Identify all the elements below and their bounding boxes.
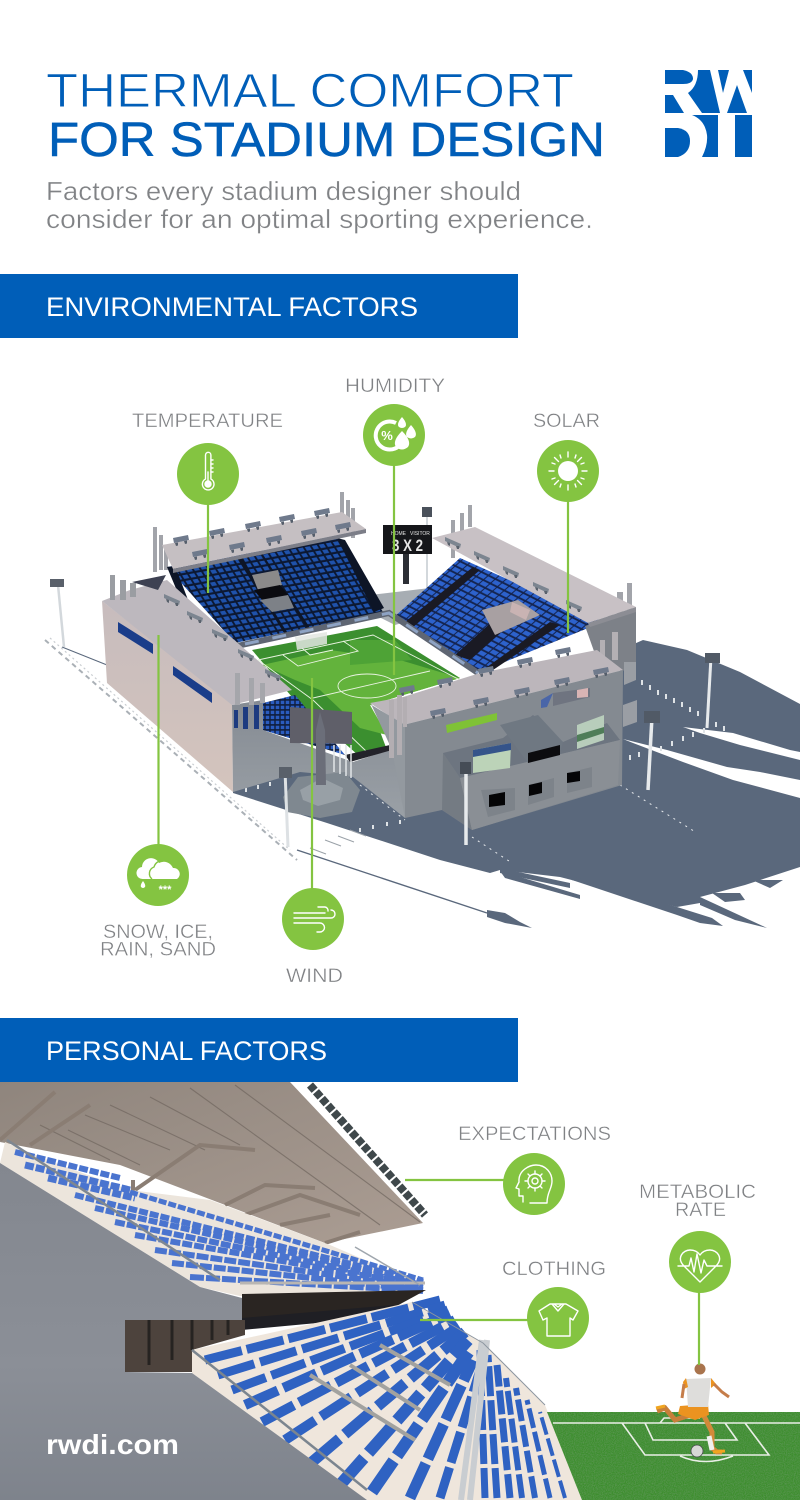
callout: solar [533, 411, 600, 633]
right stand seats [393, 558, 603, 672]
pitch markings [553, 1418, 800, 1462]
callout: snow, ice, rain, sand: RAIN, SAND [100, 940, 216, 960]
grass [547, 1412, 800, 1500]
callout: temperature [132, 411, 283, 593]
icon: cloud with snow and rain: *** [159, 884, 172, 896]
back scoreboard plaza [370, 588, 440, 625]
title [46, 65, 605, 167]
title: FOR STADIUM DESIGN [48, 114, 605, 167]
upper tier seats [0, 1142, 423, 1296]
banner: environmental factors: ENVIRONMENTAL FACTORS [46, 292, 418, 322]
subtitle: Factors every stadium designer should [46, 176, 521, 206]
banner: personal factors: PERSONAL FACTORS [46, 1036, 327, 1066]
callout: expectations: EXPECTATIONS [458, 1124, 611, 1145]
callout: expectations [405, 1124, 611, 1215]
back stand towers [153, 492, 632, 631]
subtitle [46, 176, 593, 234]
right tower [585, 608, 636, 672]
footer url: rwdi.com [46, 1429, 179, 1460]
callout: humidity [345, 376, 445, 675]
left wing [102, 601, 233, 792]
roof: right stand [432, 527, 636, 623]
icon: sun [549, 452, 587, 490]
front left wall [232, 700, 405, 818]
roof underside [0, 1082, 423, 1243]
callout: snow, ice, rain, sand [100, 635, 216, 960]
front right stand [370, 650, 623, 725]
icon: cloud with snow and rain [136, 858, 180, 896]
callout: wind [282, 678, 344, 987]
flood light poles [50, 507, 720, 790]
stadium illustration [45, 492, 800, 928]
callout: metabolic rate [639, 1182, 756, 1365]
callout: wind: WIND [286, 966, 343, 987]
icon: heart with pulse [678, 1250, 722, 1282]
ground outline lines [297, 850, 487, 913]
callout: metabolic rate: RATE [675, 1200, 726, 1221]
scoreboard: HOME [391, 531, 407, 537]
callout: humidity: HUMIDITY [345, 376, 445, 397]
icon: wind [294, 907, 335, 932]
roof lights [164, 508, 609, 719]
callout: metabolic rate: METABOLIC [639, 1182, 756, 1203]
scoreboard: 3 X 2 [392, 536, 423, 555]
icon: t-shirt [539, 1304, 578, 1336]
grey concrete wall [0, 1163, 367, 1500]
icon: head with gear [516, 1165, 552, 1203]
title: THERMAL COMFORT [46, 65, 574, 118]
pitch [252, 626, 460, 755]
banner: environmental factors [0, 274, 518, 338]
shadow tails [487, 868, 783, 928]
subtitle: consider for an optimal sporting experience. [46, 204, 593, 234]
callout: clothing [420, 1259, 606, 1349]
callout: temperature: TEMPERATURE [132, 411, 283, 432]
stand perspective image [0, 1082, 800, 1500]
logo: RWDI [665, 70, 752, 157]
annex and screens [442, 715, 620, 845]
lower tier [192, 1302, 582, 1500]
roof: left stand [162, 512, 366, 569]
lights row on roof edge [310, 1085, 425, 1215]
scoreboard [383, 525, 432, 584]
player [656, 1364, 729, 1457]
scoreboard: VISITOR [410, 531, 430, 537]
callout: clothing: CLOTHING [502, 1259, 606, 1280]
callout: snow, ice, rain, sand: SNOW, ICE, [103, 922, 213, 943]
banner: personal factors [0, 1018, 518, 1082]
hospitality band [242, 1290, 426, 1320]
callout: solar: SOLAR [533, 411, 600, 432]
left stand seats [167, 538, 383, 643]
pitch rims [237, 613, 478, 673]
front big board and fountain [283, 707, 360, 818]
icon: thermometer [202, 452, 214, 490]
icon: humidity drops: % [381, 428, 393, 443]
ground shadow [233, 640, 800, 907]
icon: humidity drops [376, 417, 416, 450]
rear pole in front of wall [279, 767, 292, 847]
